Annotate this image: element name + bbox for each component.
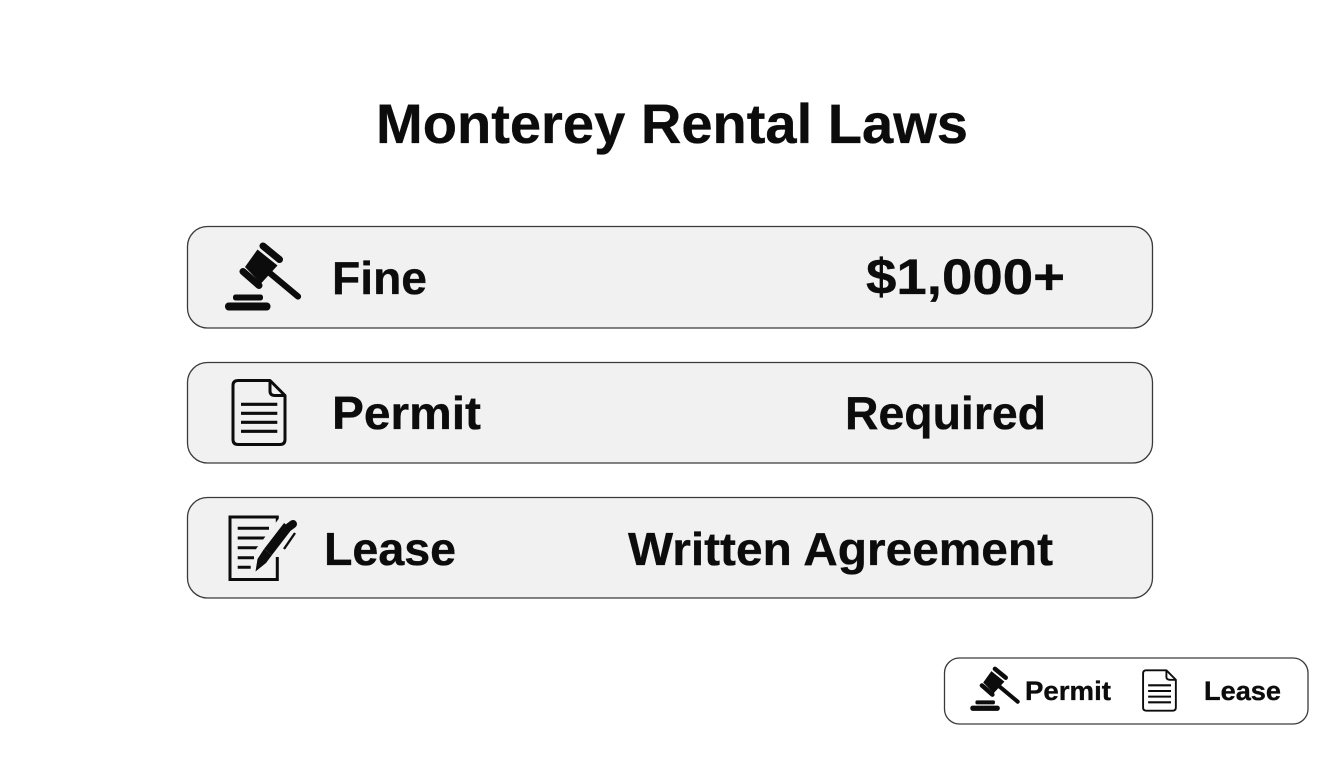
- panel: lease: [188, 498, 1152, 598]
- panel: fine: [188, 226, 1152, 328]
- value: permit status: Required: [845, 387, 1046, 439]
- label: permit: Permit: [332, 387, 481, 439]
- legend icon: gavel: [970, 669, 1018, 711]
- icon: lease and pen: [230, 517, 295, 580]
- legend label: permit: Permit: [1025, 676, 1111, 706]
- icon: gavel: [225, 246, 298, 310]
- icon: document: [233, 380, 285, 444]
- value: lease type: Written Agreement: [628, 523, 1053, 575]
- value: fine amount: $1,000+: [866, 249, 1065, 305]
- title: Monterey Rental Laws: [376, 92, 968, 155]
- legend: [944, 658, 1308, 724]
- label: fine: Fine: [332, 252, 427, 304]
- legend label: lease: Lease: [1204, 676, 1281, 706]
- label: lease: Lease: [324, 523, 456, 575]
- panel: permit: [188, 362, 1152, 463]
- legend icon: document: [1143, 670, 1176, 711]
